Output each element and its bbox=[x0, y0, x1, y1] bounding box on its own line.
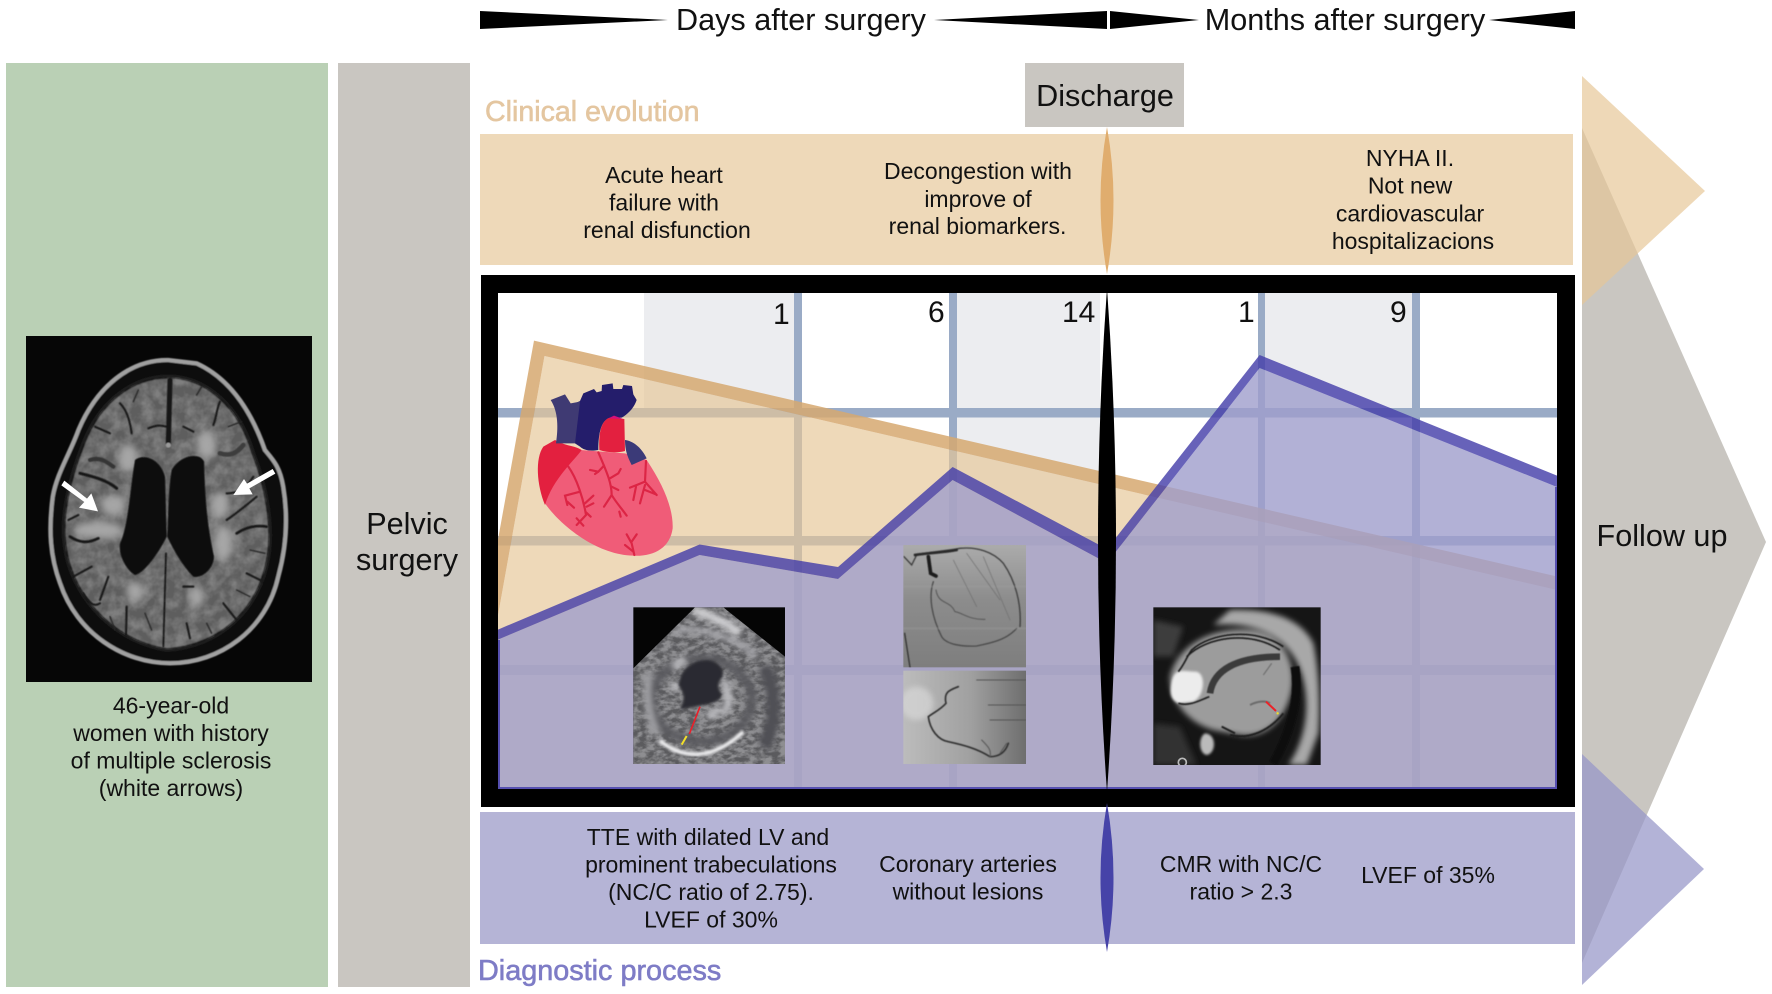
text: coronary arteries bbox=[879, 851, 1057, 904]
timeline header: days after surgery bbox=[480, 3, 1107, 37]
measurement arrow bbox=[1266, 702, 1279, 714]
text: TTE findings bbox=[585, 824, 837, 932]
arrow: diagnostic process bbox=[1582, 754, 1704, 985]
chart time labels: 14 bbox=[1062, 296, 1095, 329]
panel: clinical evolution band bbox=[480, 134, 1573, 265]
panel: pelvic surgery: Pelvic bbox=[366, 507, 448, 541]
text: acute heart failure bbox=[583, 162, 751, 243]
chart time labels: 6 bbox=[928, 296, 945, 329]
text: coronary arteries: without lesions bbox=[892, 878, 1043, 904]
text: CMR: CMR with NC/C bbox=[1160, 851, 1322, 877]
grid lines bbox=[498, 293, 1557, 573]
text: decongestion: renal biomarkers. bbox=[889, 213, 1066, 239]
chart time labels: 9 bbox=[1390, 296, 1407, 329]
heading: clinical evolution: Clinical evolution bbox=[485, 96, 700, 128]
icon: heart bbox=[538, 383, 673, 556]
text: decongestion: Decongestion with bbox=[884, 158, 1072, 184]
measurement arrows bbox=[682, 707, 700, 745]
text: acute heart failure: renal disfunction bbox=[583, 217, 751, 243]
text: TTE findings: LVEF of 30% bbox=[644, 906, 778, 932]
timeline header: days after surgery: Days after surgery bbox=[676, 3, 927, 37]
text: TTE findings: (NC/C ratio of 2.75). bbox=[608, 879, 814, 905]
discharge box: Discharge bbox=[1036, 79, 1174, 113]
timeline header: months after surgery: Months after surgery bbox=[1205, 3, 1486, 37]
chart: evolution over time bbox=[481, 275, 1575, 807]
panel: pelvic surgery bbox=[338, 63, 470, 987]
cardiac MRI image bbox=[1153, 607, 1321, 766]
text: acute heart failure: failure with bbox=[609, 190, 719, 216]
discharge box bbox=[1025, 63, 1184, 127]
patient description text: of multiple sclerosis bbox=[71, 748, 271, 774]
text: TTE findings: prominent trabeculations bbox=[585, 852, 837, 878]
text: NYHA II: cardiovascular bbox=[1336, 200, 1484, 226]
icon: left white arrow bbox=[61, 481, 98, 511]
area: clinical evolution bbox=[497, 341, 1557, 789]
panel: diagnostic process band bbox=[480, 812, 1575, 944]
shaded time columns bbox=[644, 293, 1412, 471]
brain MRI image with white arrows bbox=[26, 336, 312, 682]
chart time labels: 1 bbox=[1238, 296, 1255, 329]
icon: right white arrow bbox=[233, 469, 275, 495]
text: LVEF 35: LVEF of 35% bbox=[1361, 862, 1495, 888]
patient description text: 46-year-old bbox=[113, 692, 229, 718]
timeline header: months after surgery bbox=[1110, 3, 1575, 37]
text: acute heart failure: Acute heart bbox=[605, 162, 723, 188]
area: diagnostic process bbox=[497, 355, 1557, 789]
discharge marker: black spike bbox=[1098, 288, 1116, 792]
panel: pelvic surgery: surgery bbox=[356, 543, 459, 577]
text: NYHA II bbox=[1332, 145, 1494, 254]
text: TTE findings: TTE with dilated LV and bbox=[587, 824, 829, 850]
text: decongestion bbox=[884, 158, 1072, 239]
text: NYHA II: Not new bbox=[1368, 172, 1453, 198]
echocardiogram image bbox=[633, 607, 785, 764]
chart time labels: 1 bbox=[773, 298, 790, 331]
heading: diagnostic process: Diagnostic process bbox=[478, 955, 721, 987]
text: decongestion: improve of bbox=[924, 186, 1032, 212]
panel: patient history bbox=[6, 63, 328, 987]
text: CMR: ratio > 2.3 bbox=[1190, 878, 1292, 904]
patient description text bbox=[71, 692, 271, 801]
arrow: follow up: Follow up bbox=[1597, 519, 1727, 553]
text: NYHA II: NYHA II. bbox=[1366, 145, 1454, 171]
text: CMR bbox=[1160, 851, 1322, 904]
text: NYHA II: hospitalizacions bbox=[1332, 228, 1494, 254]
discharge marker: orange lens bbox=[1100, 127, 1114, 274]
patient description text: (white arrows) bbox=[99, 775, 243, 801]
chart time labels bbox=[773, 296, 1407, 331]
arrow: clinical evolution bbox=[1582, 76, 1705, 305]
patient description text: women with history bbox=[72, 720, 269, 746]
arrow: follow up bbox=[1582, 128, 1766, 963]
discharge marker: purple lens bbox=[1100, 803, 1114, 952]
text: coronary arteries: Coronary arteries bbox=[879, 851, 1057, 877]
coronary angiography images bbox=[900, 545, 1026, 764]
